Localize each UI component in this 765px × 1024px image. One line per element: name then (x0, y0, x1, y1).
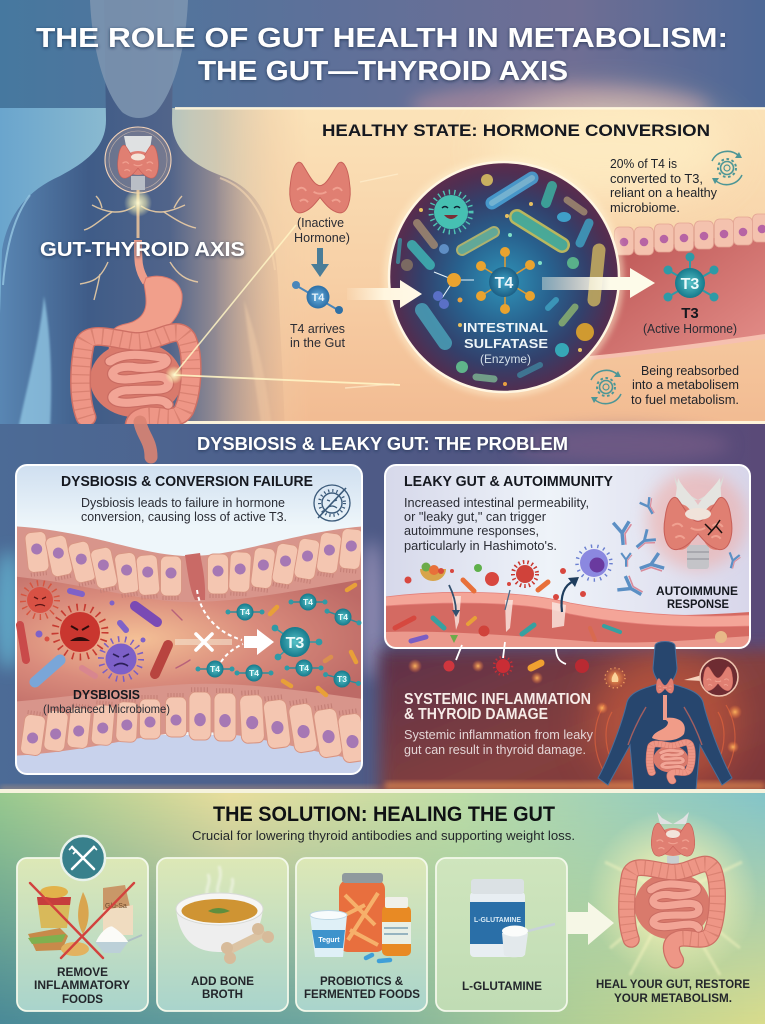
section band: dysbiosis (0, 424, 765, 793)
yellow microbes (270, 585, 356, 695)
panel body text (81, 495, 287, 524)
label: T4 arrives (290, 321, 345, 350)
glow on neck (124, 189, 152, 217)
T3 molecule, failed conversion (272, 625, 322, 660)
head and neck (90, 0, 188, 118)
title (36, 22, 728, 86)
T4 molecule inside circle (476, 247, 535, 314)
axis label: GUT-THYROID AXIS (40, 239, 245, 261)
bacteria inside circle (398, 178, 599, 379)
callout beams from gut (165, 174, 400, 388)
molecule: T4: T4 (312, 292, 325, 304)
epithelium (386, 604, 749, 647)
heading: systemic inflammation (404, 691, 591, 723)
kimchi jar (339, 873, 385, 952)
human torso silhouette (0, 0, 285, 440)
tub (470, 879, 525, 957)
icon: gear top (712, 151, 742, 185)
heading: healthy state: HEALTHY STATE: HORMONE CONVERSION (322, 121, 710, 140)
label: ADD BONE (191, 974, 254, 988)
label: BROTH (202, 987, 243, 1001)
label: autoimmune response: RESPONSE (667, 597, 729, 611)
free T4 molecules: T4 (299, 663, 309, 673)
body text: systemic inflammation (404, 728, 594, 757)
card: add bone broth (157, 858, 288, 1011)
panel: dysbiosis and conversion failure (10, 465, 370, 775)
label (191, 974, 254, 1001)
body text: systemic inflammation: gut can result in thyroid damage. (404, 743, 586, 757)
molecule: T3: T3 (681, 276, 699, 293)
note: 20 percent (610, 156, 717, 215)
panel heading: LEAKY GUT & AUTOIMMUNITY (404, 474, 613, 490)
molecule: T4 (292, 281, 343, 314)
note: reabsorbed: into a metabolisem (632, 377, 739, 392)
free T4 molecules: T4 (210, 664, 220, 674)
bowl of broth (176, 893, 263, 952)
foods (28, 885, 142, 956)
oesophagus and stomach (109, 240, 182, 351)
panel body text: or "leaky gut," can trigger (404, 509, 547, 524)
axis nerve branches (80, 190, 198, 300)
label: FERMENTED FOODS (304, 987, 420, 1001)
intestinal cells, lower wall (20, 687, 367, 763)
arrow: to healed gut (567, 902, 614, 945)
T3 molecule, failed conversion: T3 (286, 635, 304, 652)
red cross-out (30, 883, 134, 958)
note: 20 percent: converted to T3, (610, 171, 703, 186)
card: probiotics and fermented foods (296, 858, 427, 1011)
label: INFLAMMATORY (34, 978, 130, 992)
note: reabsorbed (631, 363, 739, 407)
particles escaping into bloodstream (408, 642, 589, 684)
label: intestinal sulfatase: INTESTINAL (463, 320, 548, 335)
label: dysbiosis: (Imbalanced Microbiome) (43, 702, 170, 716)
card: L-glutamine (436, 858, 567, 1011)
label: REMOVE (57, 965, 108, 979)
label: heal your gut: YOUR METABOLISM. (614, 991, 732, 1005)
note: 20 percent: reliant on a healthy (610, 185, 717, 200)
panel: gut-thyroid axis body (0, 0, 765, 440)
healthy gut wall (590, 214, 765, 360)
subheading: solution: Crucial for lowering thyroid antibodies and supporting weight loss. (192, 828, 575, 843)
background: top band (0, 0, 765, 112)
healed gut figure (605, 812, 742, 975)
label: T4 arrives: in the Gut (290, 335, 345, 350)
callout: damaged thyroid (684, 658, 738, 696)
label (304, 974, 420, 1001)
molecule: T3 (664, 252, 718, 302)
free T4 molecules (196, 594, 364, 692)
scoop (502, 924, 555, 957)
thyroid circle icon (105, 127, 171, 193)
label: inactive hormone (294, 215, 350, 245)
label: autoimmune response: AUTOIMMUNE (656, 584, 738, 598)
bone (221, 923, 274, 964)
label: inactive hormone: Hormone) (294, 230, 350, 245)
title: THE ROLE OF GUT HEALTH IN METABOLISM: (36, 22, 728, 53)
bacteria: harmful microbes (20, 583, 190, 682)
label: intestinal sulfatase: SULFATASE (464, 336, 548, 351)
label: T4 arrives: T4 arrives (290, 321, 345, 336)
heading: systemic inflammation: & THYROID DAMAGE (404, 706, 548, 723)
badge: fork and knife (61, 836, 105, 880)
immune cell (577, 546, 611, 580)
intestines (80, 332, 191, 441)
panel body text: Dysbiosis leads to failure in hormone (81, 495, 285, 510)
label: intestinal sulfatase: (Enzyme) (480, 352, 531, 366)
panel heading: DYSBIOSIS & CONVERSION FAILURE (61, 474, 313, 490)
card: remove inflammatory foods (17, 836, 148, 1011)
panel body text (404, 495, 589, 553)
label: PROBIOTICS & (320, 974, 403, 988)
enzyme molecule (433, 272, 474, 309)
yogurt cup (310, 910, 347, 957)
intestinal cells, upper wall (24, 528, 364, 600)
heading: systemic inflammation: SYSTEMIC INFLAMMATION (404, 691, 591, 708)
rectum tail of large intestine (140, 422, 151, 457)
label: dysbiosis: DYSBIOSIS (73, 687, 140, 702)
heading: solution: THE SOLUTION: HEALING THE GUT (213, 803, 555, 826)
note: reabsorbed: to fuel metabolism. (631, 392, 739, 407)
label: T3 active hormone: (Active Hormone) (643, 322, 737, 336)
panel: solution background (0, 789, 765, 1024)
arrow: T4 into circle (347, 280, 422, 308)
panel: leaky gut and autoimmunity (385, 465, 750, 650)
label: intestinal sulfatase (463, 320, 548, 366)
note: 20 percent: 20% of T4 is (610, 156, 677, 171)
label: T3 active hormone (643, 305, 737, 336)
label: dysbiosis (43, 687, 170, 716)
label: L-GLUTAMINE (462, 979, 542, 993)
yogurt cup: Tegurt (318, 937, 340, 944)
panel body text: autoimmune responses, (404, 523, 539, 538)
free T4 molecules: T4 (338, 612, 348, 622)
label: inactive hormone: (Inactive (297, 215, 344, 230)
inflammation glow markers (596, 667, 742, 753)
arrow: circle to T3 (542, 268, 655, 298)
microbiome circle (384, 157, 624, 397)
body text: systemic inflammation: Systemic inflammation from leaky (404, 728, 594, 742)
panel: healthy state background (224, 110, 765, 421)
panel body text: particularly in Hashimoto's. (404, 538, 557, 553)
panel body text: conversion, causing loss of active T3. (81, 509, 287, 524)
figure: inflamed body (595, 642, 735, 790)
tight junction gaps (452, 596, 566, 632)
foods: Glu-Sa (105, 903, 127, 910)
free T4 molecules: T4 (303, 597, 313, 607)
label: heal your gut (596, 977, 750, 1005)
thyroid under attack (664, 474, 732, 569)
panel: systemic inflammation background (380, 650, 765, 820)
note: reabsorbed: Being reabsorbed (641, 363, 739, 378)
free T4 molecules: T4 (249, 668, 259, 678)
food and particles crossing the gut wall (395, 562, 727, 643)
label: autoimmune response (656, 584, 738, 611)
steam (207, 866, 233, 898)
label (34, 965, 130, 1006)
heading: dysbiosis and leaky gut: DYSBIOSIS & LEAKY GUT: THE PROBLEM (197, 434, 568, 454)
supplement bottle (366, 897, 411, 961)
title: THE GUT—THYROID AXIS (198, 55, 568, 86)
note: 20 percent: microbiome. (610, 200, 680, 215)
conversion failure X and arrow (175, 590, 274, 662)
panel body text: Increased intestinal permeability, (404, 495, 589, 510)
icon: crossed bacterium (314, 485, 350, 521)
label: T3 active hormone: T3 (681, 305, 699, 322)
label: FOODS (62, 992, 103, 1006)
label: heal your gut: HEAL YOUR GUT, RESTORE (596, 977, 750, 991)
antibodies (613, 496, 741, 601)
tub: L-GLUTAMINE (474, 915, 521, 924)
free T4 molecules: T3 (337, 674, 347, 684)
free T4 molecules: T4 (240, 607, 250, 617)
icon: gear bottom (591, 370, 621, 404)
icon: thyroid gland (290, 162, 350, 213)
T4 molecule inside circle: T4 (495, 275, 513, 292)
smiling bacterium (431, 192, 471, 232)
arrow: thyroid to T4 (311, 248, 329, 277)
